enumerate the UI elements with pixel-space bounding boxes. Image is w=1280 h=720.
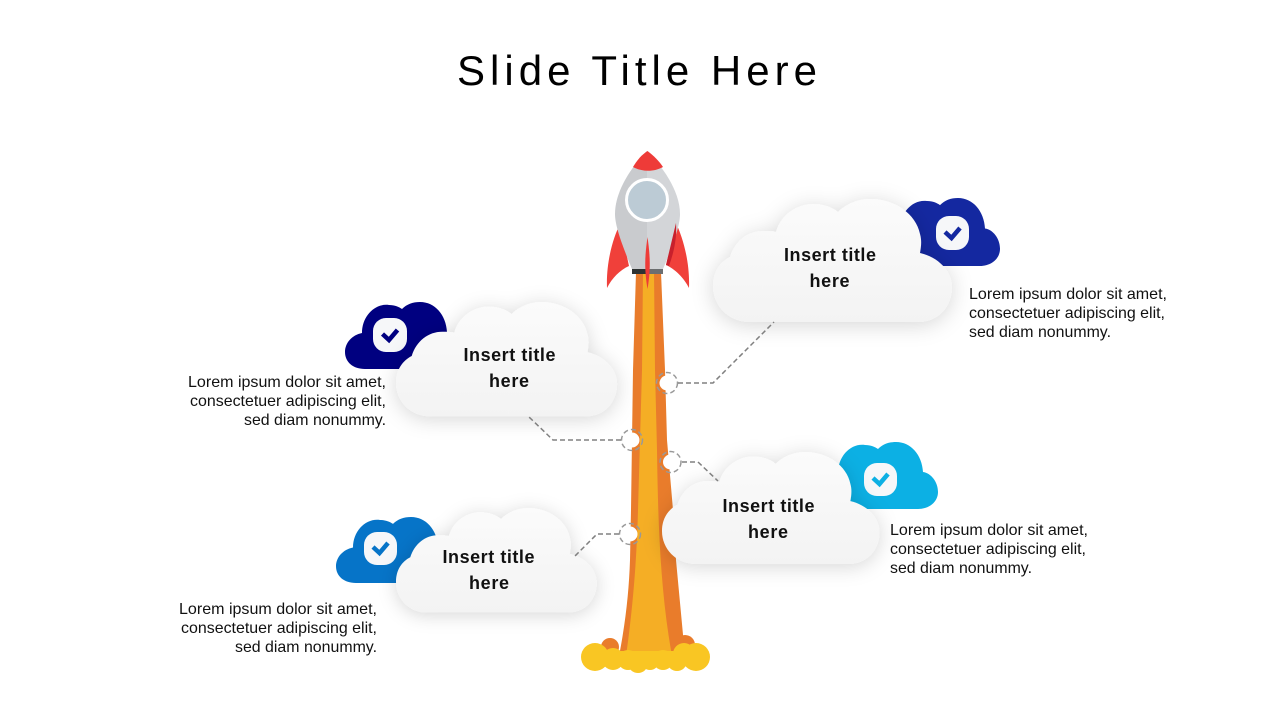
- rocket flame and exhaust: [581, 272, 710, 673]
- icon: cloud badge dark blue: [883, 198, 1000, 266]
- nose cone: [633, 151, 663, 171]
- centre fin: [645, 237, 650, 289]
- cloud: middle left: Insert title: [464, 345, 556, 365]
- cloud: lower left: here: [469, 573, 509, 593]
- body left: [615, 151, 647, 269]
- window: [626, 180, 668, 220]
- text block: lower right: sed diam nonummy.: [890, 560, 1032, 577]
- connector: top right: [656, 322, 774, 394]
- text block: top right: consectetuer adipiscing elit,: [969, 305, 1165, 322]
- text block: middle left: Lorem ipsum dolor sit amet,: [188, 374, 386, 391]
- text block: lower right: Lorem ipsum dolor sit amet,: [890, 522, 1088, 539]
- cloud: top right: Insert title: [784, 245, 876, 265]
- text block: top right: sed diam nonummy.: [969, 324, 1111, 341]
- text block: middle left: sed diam nonummy.: [244, 412, 386, 429]
- cloud: middle left: [396, 302, 617, 416]
- text block: middle left: [188, 374, 386, 429]
- left fin: [607, 224, 629, 288]
- text block: lower left: Lorem ipsum dolor sit amet,: [179, 601, 377, 618]
- body right: [647, 151, 680, 269]
- right fin: [666, 223, 689, 288]
- cloud: middle left: here: [489, 371, 529, 391]
- rocket: [607, 151, 689, 289]
- text block: lower left: sed diam nonummy.: [235, 639, 377, 656]
- connector: middle left: [528, 416, 642, 450]
- icon: cloud badge cyan: [821, 442, 938, 509]
- cloud: lower right: [662, 452, 879, 564]
- cloud: top right: [713, 199, 952, 322]
- right fin shadow: [666, 223, 676, 266]
- text block: top right: Lorem ipsum dolor sit amet,: [969, 286, 1167, 303]
- text block: lower left: consectetuer adipiscing elit,: [181, 620, 377, 637]
- icon: cloud badge navy: [345, 302, 462, 369]
- text block: lower left: [179, 601, 377, 656]
- connector: lower right: [660, 452, 718, 481]
- cloud: lower right: here: [748, 522, 788, 542]
- cloud: lower left: Insert title: [442, 547, 534, 567]
- text block: top right: [969, 286, 1167, 341]
- text block: lower right: consectetuer adipiscing elit,: [890, 541, 1086, 558]
- text block: lower right: [890, 522, 1088, 577]
- nozzle: [632, 269, 647, 274]
- cloud: lower left: [396, 508, 597, 613]
- cloud: lower right: Insert title: [722, 496, 814, 516]
- text block: middle left: consectetuer adipiscing elit,: [190, 393, 386, 410]
- icon: cloud badge blue: [336, 517, 453, 583]
- title: Slide Title Here: [457, 47, 817, 94]
- cloud: top right: here: [810, 271, 850, 291]
- connector: lower left: [575, 524, 640, 556]
